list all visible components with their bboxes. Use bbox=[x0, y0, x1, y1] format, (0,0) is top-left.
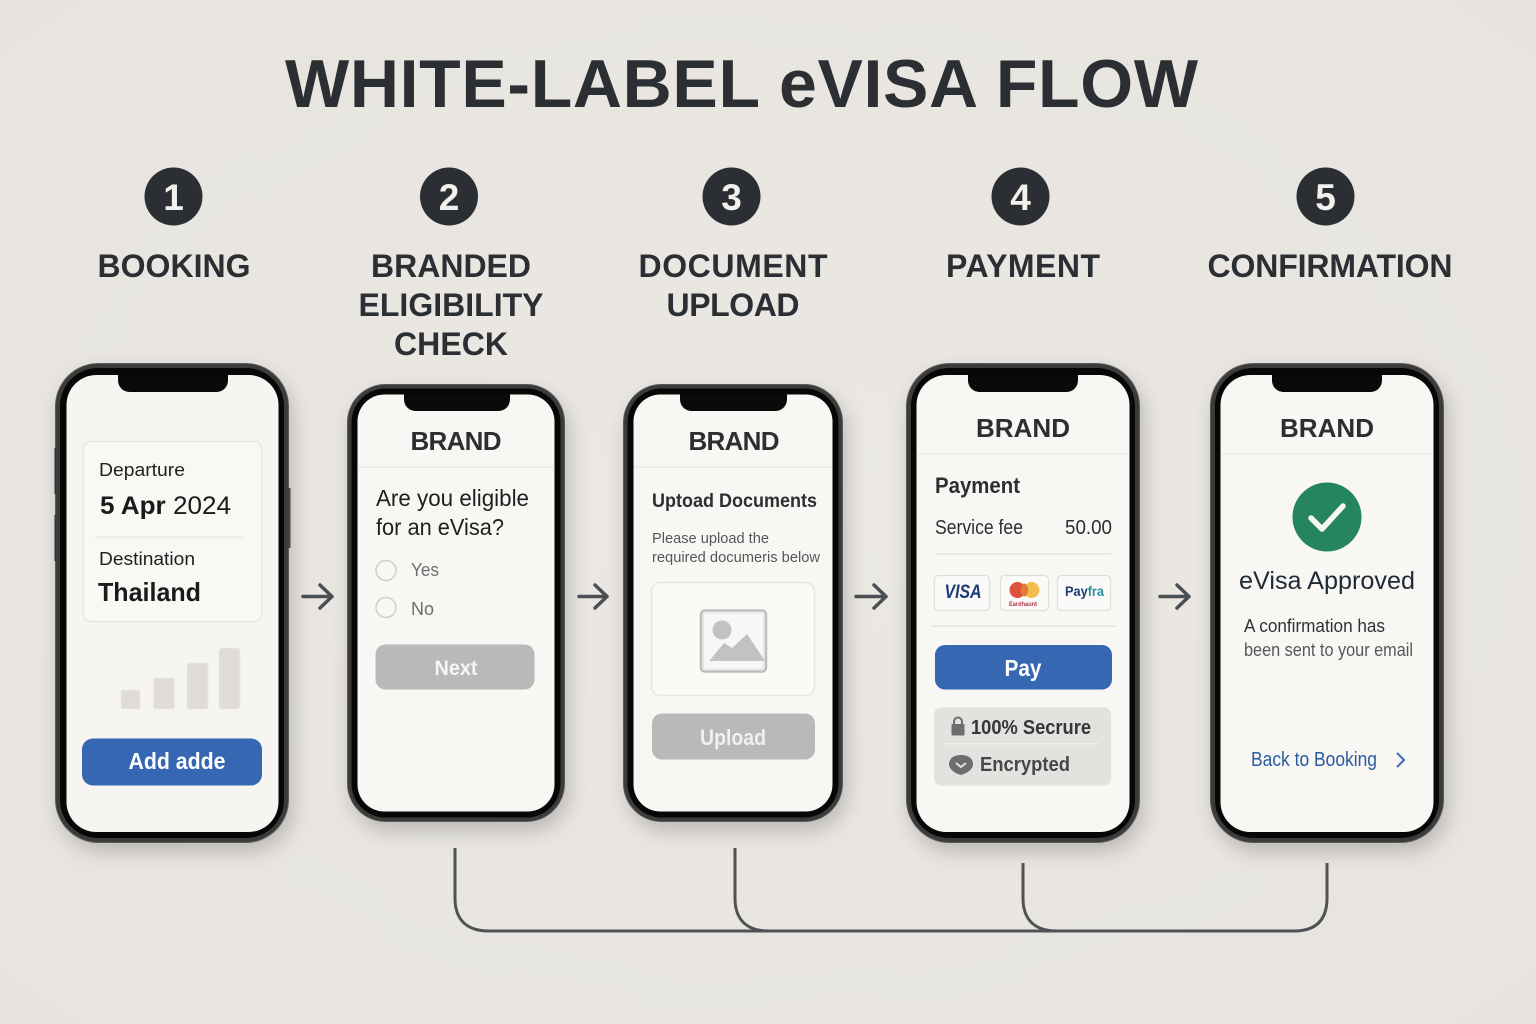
step 1 heading bbox=[98, 168, 250, 284]
upload button bbox=[652, 714, 815, 760]
pay button bbox=[935, 645, 1112, 690]
no option bbox=[376, 598, 434, 619]
arrow 2 bbox=[579, 585, 607, 608]
step 3 heading bbox=[638, 168, 828, 323]
step 1 heading: BOOKING bbox=[98, 248, 250, 284]
icon: lock bbox=[952, 718, 964, 736]
upload instructions: required documeris below bbox=[652, 550, 821, 566]
step 3 heading: UPLOAD bbox=[666, 287, 800, 323]
phone 2: eligibility bbox=[348, 384, 564, 822]
step 2 heading: CHECK bbox=[394, 326, 508, 362]
card logo: payfra bbox=[1058, 576, 1110, 610]
next button: Next bbox=[434, 656, 478, 680]
confirmation message: A confirmation has bbox=[1244, 616, 1385, 636]
brand header: BRAND bbox=[1280, 413, 1374, 443]
next button bbox=[376, 644, 534, 690]
upload instructions bbox=[652, 531, 821, 566]
service fee row: 50.00 bbox=[1065, 517, 1112, 539]
upload instructions: Please upload the bbox=[652, 531, 769, 547]
eligibility question bbox=[376, 485, 529, 540]
booking details card bbox=[83, 442, 262, 622]
step 2 heading: ELIGIBILITY bbox=[358, 287, 544, 323]
phone 1: booking bbox=[54, 364, 290, 842]
card logo: mastercard bbox=[1000, 576, 1048, 610]
arrow 3 bbox=[856, 585, 886, 608]
service fee row: Service fee bbox=[935, 517, 1023, 539]
card logo: mastercard: Eardhaunt bbox=[1009, 602, 1037, 608]
step 3 heading: 3 bbox=[721, 177, 742, 218]
upload heading: Uptoad Documents bbox=[652, 490, 817, 512]
confirmation message bbox=[1244, 616, 1413, 660]
confirmation message: been sent to your email bbox=[1244, 640, 1413, 660]
add button: Add adde bbox=[128, 748, 226, 774]
eligibility question: for an eVisa? bbox=[376, 514, 504, 540]
booking details card: 5 Apr 2024 bbox=[100, 492, 231, 520]
eligibility question: Are you eligible bbox=[376, 485, 529, 511]
yes option bbox=[376, 560, 439, 580]
booking details card: Thailand bbox=[98, 577, 201, 607]
booking details card: Departure bbox=[99, 460, 185, 480]
phone 5: confirmation bbox=[1210, 364, 1444, 842]
brand header: BRAND bbox=[976, 413, 1070, 443]
step 1 heading: 1 bbox=[163, 177, 184, 218]
step 4 heading bbox=[946, 168, 1100, 284]
upload button: Upload bbox=[700, 725, 766, 750]
card logo: payfra: Payfra bbox=[1065, 584, 1104, 599]
card logo: visa: VISA bbox=[944, 582, 982, 603]
card logo: visa bbox=[934, 576, 990, 610]
step 5 heading: CONFIRMATION bbox=[1208, 248, 1452, 284]
yes option: Yes bbox=[411, 560, 439, 580]
upload dropzone bbox=[652, 582, 814, 696]
step 2 heading: BRANDED bbox=[371, 248, 531, 284]
brand header: BRAND bbox=[688, 426, 780, 456]
phone 3: document upload bbox=[624, 384, 842, 822]
connector bracket bbox=[455, 848, 1327, 931]
security panel: Encrypted bbox=[980, 754, 1070, 776]
title: WHITE-LABEL eVISA FLOW bbox=[285, 46, 1199, 122]
step 2 heading bbox=[358, 168, 544, 362]
payment heading: Payment bbox=[935, 473, 1021, 498]
arrow 4 bbox=[1160, 585, 1189, 608]
step 3 heading: DOCUMENT bbox=[638, 248, 828, 284]
step 5 heading bbox=[1208, 168, 1452, 284]
icon: green check bbox=[1292, 482, 1362, 552]
approved heading: eVisa Approved bbox=[1239, 567, 1415, 595]
step 5 heading: 5 bbox=[1315, 177, 1336, 218]
phone 4: payment bbox=[906, 364, 1140, 842]
pay button: Pay bbox=[1004, 655, 1042, 681]
brand header: BRAND bbox=[410, 426, 502, 456]
step 4 heading: PAYMENT bbox=[946, 248, 1100, 284]
icon: shield check bbox=[949, 755, 973, 775]
back link: Back to Booking bbox=[1251, 749, 1377, 771]
step 2 heading: 2 bbox=[439, 177, 459, 218]
no option: No bbox=[411, 599, 434, 619]
booking details card: Destination bbox=[99, 549, 195, 569]
faded bar chart bbox=[121, 648, 240, 709]
service fee row bbox=[935, 517, 1112, 555]
security panel: 100% Secrure bbox=[971, 717, 1091, 739]
icon: image placeholder bbox=[701, 610, 766, 672]
step 4 heading: 4 bbox=[1010, 177, 1031, 218]
add button bbox=[82, 738, 262, 786]
security panel bbox=[934, 708, 1111, 786]
arrow 1 bbox=[303, 585, 332, 608]
